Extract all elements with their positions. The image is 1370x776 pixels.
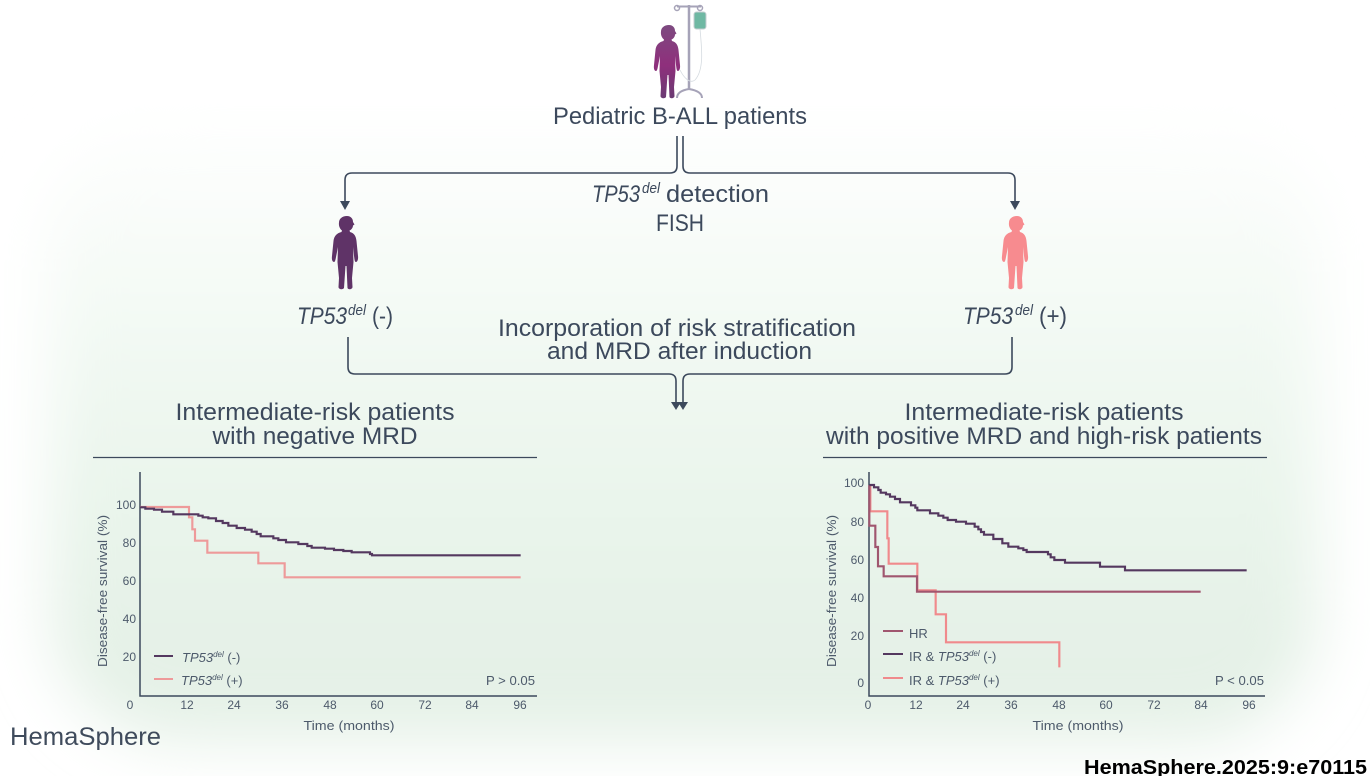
y axis labels: right chart: 60 [851, 553, 864, 567]
legend: left chart: TP53 [182, 650, 214, 665]
icon: child with IV pole [654, 5, 706, 98]
x axis labels: right chart: 36 [1004, 698, 1018, 712]
heading: patients: Pediatric B-ALL patients [553, 103, 807, 130]
x axis labels: left chart: 96 [513, 698, 527, 712]
x axis labels: right chart: 24 [956, 698, 970, 712]
y axis labels: right chart: 0 [857, 676, 864, 690]
y axis title: left chart: Disease-free survival (%) [95, 515, 110, 667]
x axis labels: left chart: 0 [127, 698, 134, 712]
heading: right panel: Intermediate-risk patients [904, 399, 1184, 426]
label: detection method [592, 180, 769, 237]
heading: left panel: Intermediate-risk patients [176, 399, 454, 426]
label: TP53del negative: (-) [372, 303, 393, 330]
x axis labels: left chart [127, 698, 527, 712]
y axis title: right chart: Disease-free survival (%) [824, 515, 839, 667]
legend: right chart: del [969, 673, 980, 682]
x axis labels: right chart [865, 698, 1256, 712]
background glow [50, 110, 1318, 742]
heading: right panel [823, 399, 1267, 458]
x axis title: right chart: Time (months) [1032, 718, 1124, 733]
axes: left chart [140, 472, 537, 696]
y axis labels: left chart: 80 [123, 536, 136, 550]
label: risk stratification: Incorporation of risk stratification [498, 315, 856, 342]
legend: left chart: del [212, 673, 223, 682]
x axis labels: right chart: 72 [1147, 698, 1161, 712]
x axis labels: left chart: 60 [370, 698, 384, 712]
x axis labels: right chart: 0 [865, 698, 872, 712]
y axis labels: right chart: 20 [851, 629, 864, 643]
label: risk stratification [498, 315, 856, 365]
heading: right panel: with positive MRD and high-risk patients [825, 423, 1262, 450]
panel: negative MRD [93, 399, 537, 733]
label: TP53del negative: del [348, 302, 367, 319]
y axis labels: left chart: 60 [123, 574, 136, 588]
label: TP53del positive [963, 302, 1067, 330]
icon: child positive [1002, 216, 1028, 289]
panel: positive MRD and high risk [823, 399, 1267, 733]
x axis labels: left chart: 72 [418, 698, 432, 712]
y axis labels: left chart: 40 [123, 612, 136, 626]
heading: left panel [93, 399, 537, 458]
x axis labels: left chart: 12 [180, 698, 194, 712]
label: TP53del positive: (+) [1039, 303, 1067, 330]
arrow: split to positive [683, 136, 1020, 210]
legend: left chart: (+) [223, 673, 243, 688]
arrow: merge from positive [678, 337, 1012, 410]
x axis labels: right chart: 84 [1194, 698, 1208, 712]
legend: right chart: (-) [980, 649, 996, 664]
axes: right chart [869, 472, 1265, 696]
label: TP53del negative [297, 302, 393, 330]
x axis labels: right chart: 60 [1099, 698, 1113, 712]
label: TP53del positive: TP53 [963, 303, 1014, 330]
y axis labels: left chart [116, 498, 136, 664]
label: TP53del positive: del [1015, 302, 1034, 319]
curve: IR TP53del positive [870, 485, 1059, 667]
x axis labels: right chart: 12 [909, 698, 923, 712]
legend: right chart: HR [909, 626, 928, 641]
y axis labels: left chart: 100 [116, 498, 136, 512]
heading: left panel: with negative MRD [211, 423, 418, 450]
label: risk stratification: and MRD after induction [547, 338, 812, 365]
legend: left chart: (-) [224, 650, 240, 665]
legend: right chart [883, 626, 1000, 688]
legend: left chart: TP53 [181, 673, 213, 688]
arrow: merge from negative [348, 337, 681, 410]
label: detection method: del [642, 180, 661, 197]
legend: right chart: IR & TP53 [909, 649, 969, 664]
survival curves: left chart [140, 507, 521, 577]
logo: HemaSphere: HemaSphere [10, 723, 161, 751]
x axis labels: right chart: 96 [1242, 698, 1256, 712]
x axis labels: left chart: 36 [275, 698, 289, 712]
curve: TP53del negative [140, 507, 521, 555]
legend: left chart [154, 650, 243, 688]
curve: HR [869, 485, 1201, 592]
y axis labels: right chart: 40 [851, 591, 864, 605]
arrow: split to negative [340, 136, 677, 210]
y axis labels: left chart: 20 [123, 650, 136, 664]
label: detection method: FISH [656, 210, 704, 237]
legend: right chart: (+) [980, 673, 1000, 688]
x axis labels: left chart: 48 [323, 698, 337, 712]
y axis labels: right chart: 80 [851, 515, 864, 529]
legend: left chart: del [213, 650, 224, 659]
y axis labels: right chart [844, 476, 864, 690]
x axis labels: left chart: 84 [465, 698, 479, 712]
x axis labels: left chart: 24 [227, 698, 241, 712]
curve: TP53del positive [140, 507, 521, 577]
p value: right chart: P < 0.05 [1215, 673, 1264, 688]
x axis title: left chart: Time (months) [304, 718, 394, 733]
x axis labels: right chart: 48 [1052, 698, 1066, 712]
curve: IR TP53del negative [869, 485, 1247, 570]
label: detection method: detection [666, 181, 769, 208]
icon: child negative [332, 216, 358, 289]
label: TP53del negative: TP53 [297, 303, 348, 330]
legend: right chart: del [969, 649, 980, 658]
label: detection method: TP53 [592, 181, 641, 208]
y axis labels: right chart: 100 [844, 476, 864, 490]
survival curves: right chart [869, 485, 1247, 667]
legend: right chart: IR & TP53 [909, 673, 969, 688]
p value: left chart: P > 0.05 [486, 673, 535, 688]
